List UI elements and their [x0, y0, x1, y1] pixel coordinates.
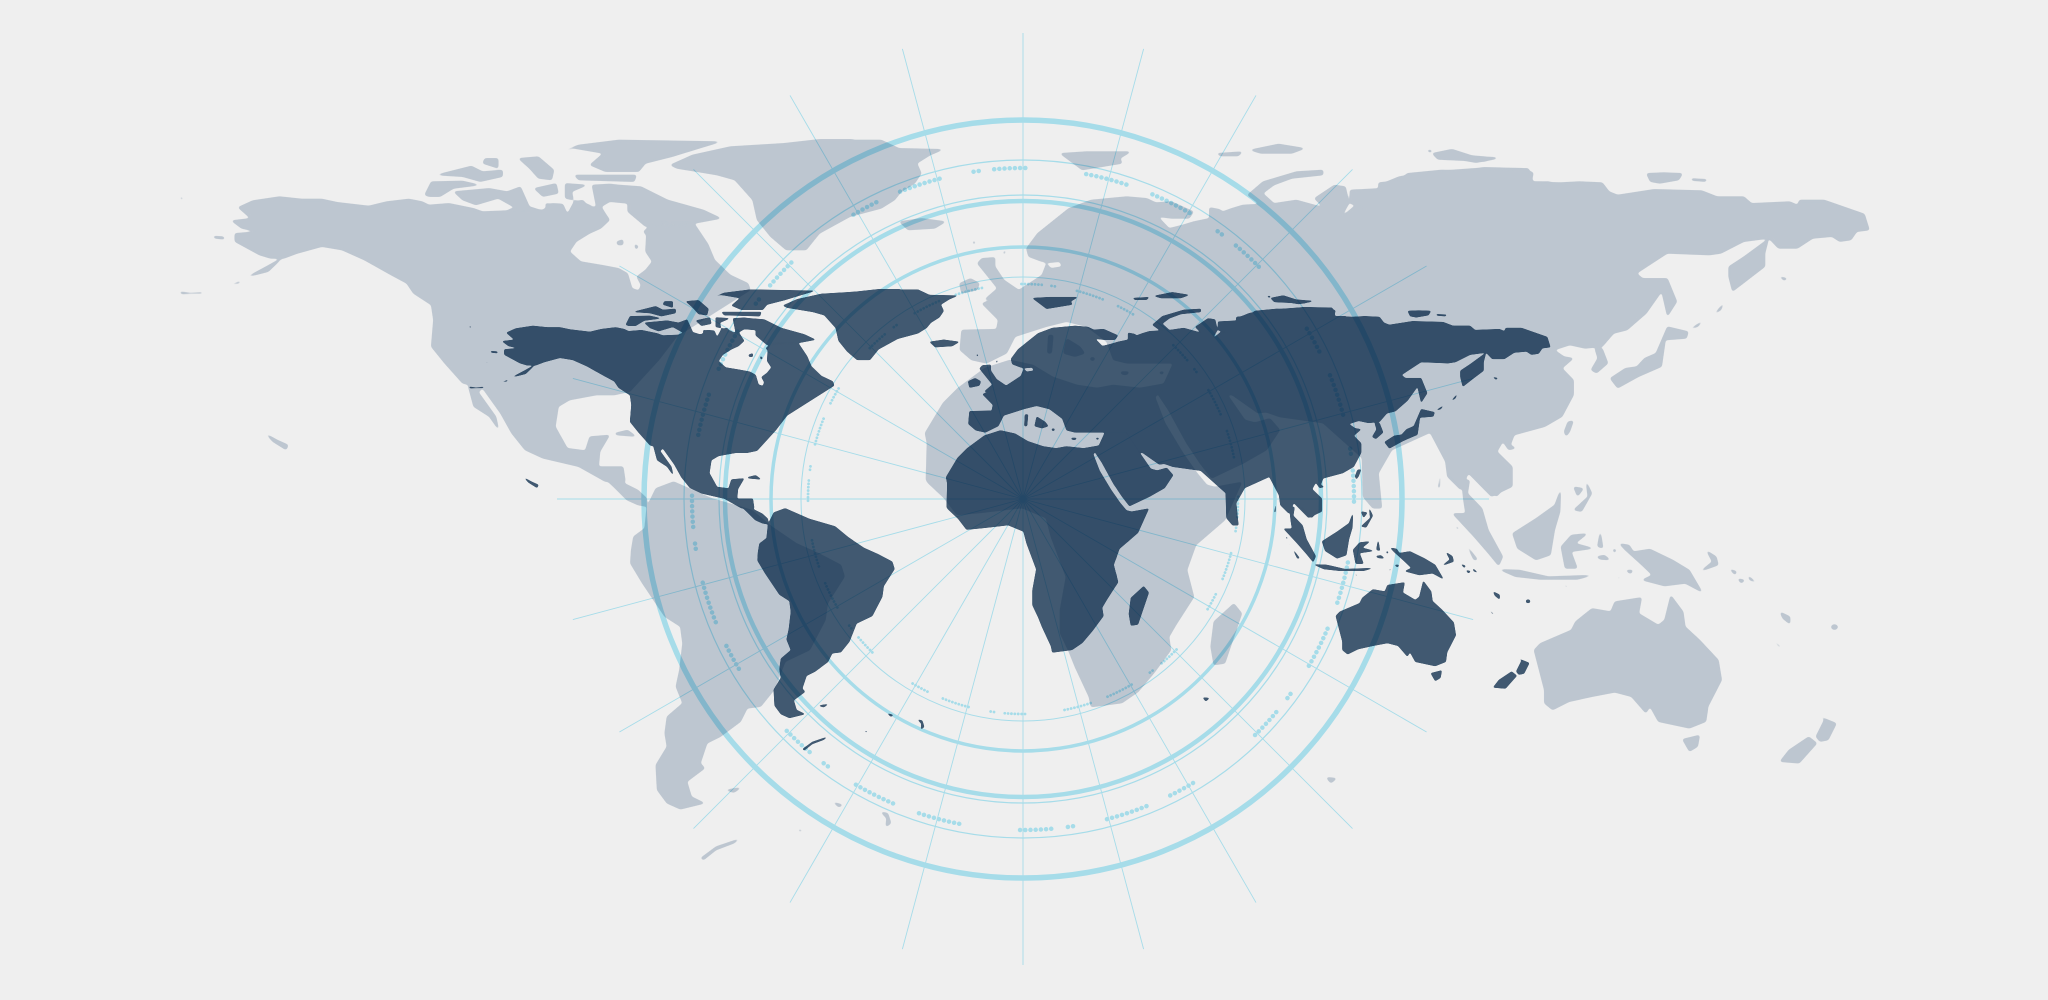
outer dot pattern: [664, 140, 1382, 858]
ring: outer thick: [644, 120, 1402, 878]
light world map: [179, 139, 1869, 860]
ring: dotted guide: [684, 160, 1362, 838]
inner dot pattern: [790, 266, 1256, 732]
radial spokes: [557, 33, 1489, 965]
ring: inner thick: [771, 247, 1275, 751]
radial target graphic: [557, 33, 1489, 965]
ring: thin double: [719, 195, 1327, 803]
Africa: [925, 360, 1242, 707]
ring: innermost thin: [801, 277, 1245, 721]
dark projected world map: [469, 289, 1550, 750]
ring: middle thick: [725, 201, 1321, 797]
